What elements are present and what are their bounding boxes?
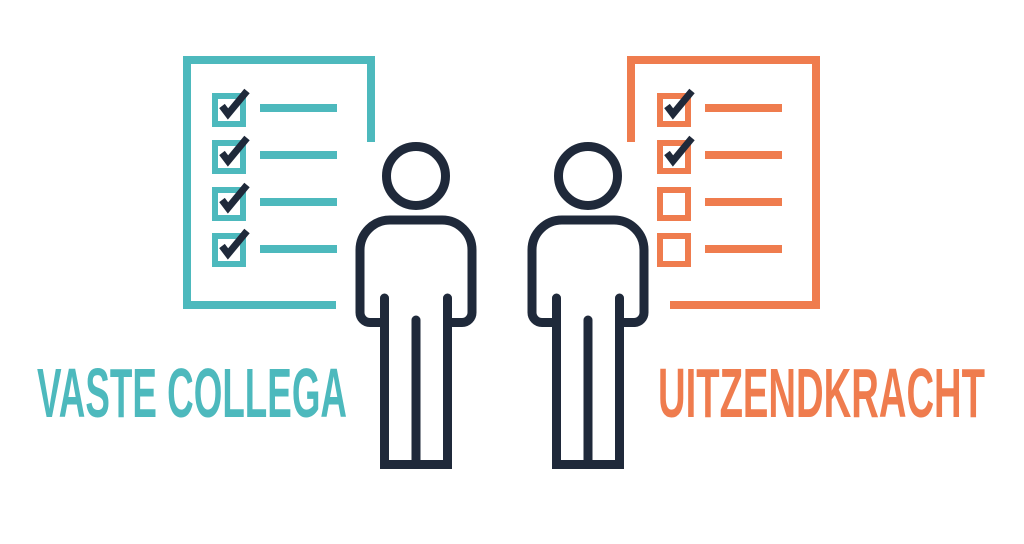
icon: person left xyxy=(360,146,472,464)
icon: person right xyxy=(532,146,644,464)
checklist: uitzendkracht xyxy=(631,60,816,305)
label: vaste collega: VASTE COLLEGA xyxy=(37,354,347,432)
checklist: vaste collega xyxy=(187,60,371,305)
